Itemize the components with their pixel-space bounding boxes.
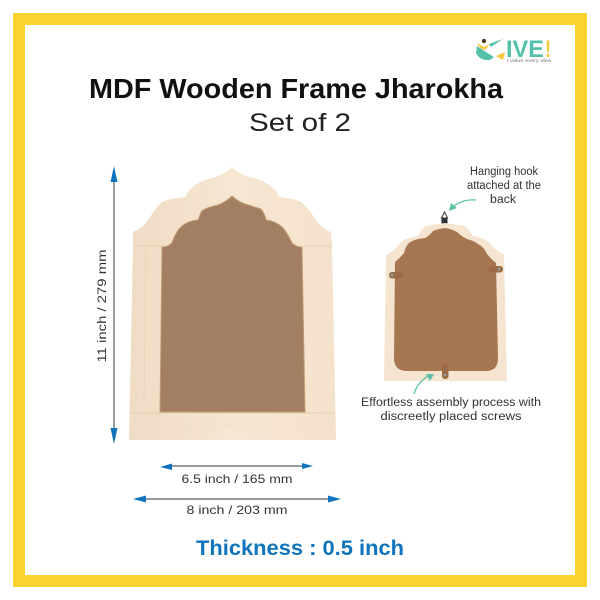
- height label: 11 inch / 279 mm: [97, 250, 109, 362]
- outer width label: 8 inch / 203 mm: [186, 503, 288, 517]
- inner width label: 6.5 inch / 165 mm: [182, 472, 292, 486]
- subtitle: Set of 2: [249, 109, 351, 137]
- arrow: to hanging hook: [449, 200, 476, 211]
- logo: IVE! value every idea: [476, 36, 552, 63]
- outer width dimension arrow: [133, 496, 341, 502]
- wooden frame body: [129, 167, 336, 440]
- retaining clip left: [389, 272, 403, 278]
- callout: hanging hook: Hanging hook: [470, 166, 538, 178]
- hanging hook: [442, 212, 448, 225]
- retaining clip right: [489, 266, 503, 272]
- callout: hanging hook: [467, 166, 541, 206]
- logo exclamation mark: !: [545, 36, 551, 63]
- frame joint lines: [130, 246, 335, 424]
- logo wordmark: IVE: [506, 36, 544, 63]
- inner width dimension arrow: [160, 463, 313, 470]
- logo tagline: I value every idea: [507, 58, 552, 63]
- brown MDF back panel: [394, 228, 498, 371]
- brown MDF backing: [160, 196, 305, 412]
- thickness label: Thickness : 0.5 inch: [196, 537, 404, 560]
- height dimension arrow: [110, 166, 118, 444]
- arrow: to screw: [414, 374, 434, 394]
- callout: assembly screws: Effortless assembly process with: [361, 397, 541, 409]
- small frame back view: [384, 212, 507, 381]
- title: MDF Wooden Frame Jharokha: [89, 73, 503, 104]
- callout: hanging hook: attached at the: [467, 180, 541, 192]
- callout: assembly screws: [361, 397, 541, 423]
- large frame front view: [129, 167, 336, 440]
- wooden frame back: [384, 223, 507, 381]
- logo figure icon: [476, 39, 505, 60]
- callout: assembly screws: discreetly placed screws: [380, 411, 522, 423]
- callout: hanging hook: back: [490, 194, 516, 206]
- retaining clip bottom: [442, 364, 448, 379]
